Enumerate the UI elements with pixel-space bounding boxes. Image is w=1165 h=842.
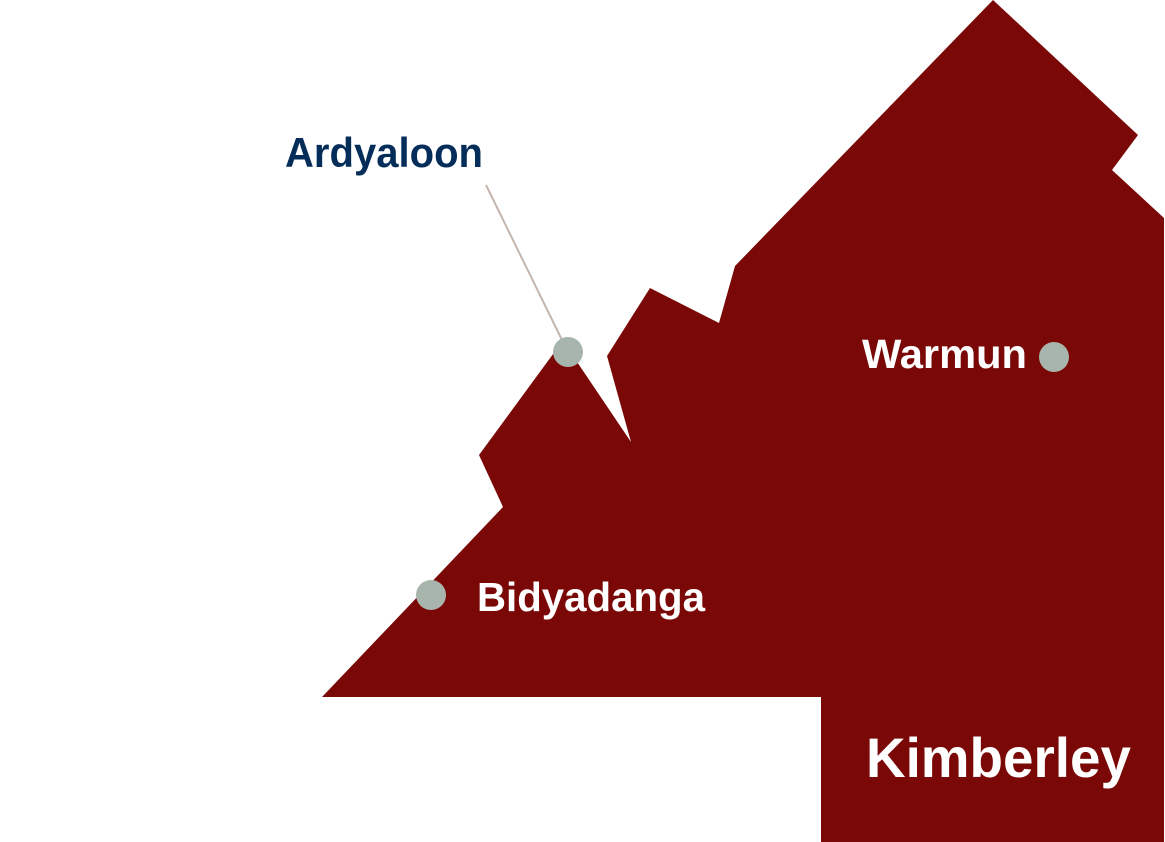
marker: Warmun: [1039, 342, 1069, 372]
marker: Bidyadanga: [416, 580, 446, 610]
marker: Ardyaloon: [553, 337, 583, 367]
label: Ardyaloon: Ardyaloon: [285, 129, 483, 176]
map: Kimberley region: [322, 0, 1164, 842]
label: Bidyadanga: Bidyadanga: [477, 574, 706, 620]
label: Warmun: Warmun: [862, 331, 1027, 377]
leader line: Ardyaloon: [486, 185, 562, 340]
label: Kimberley: Kimberley: [866, 726, 1131, 789]
